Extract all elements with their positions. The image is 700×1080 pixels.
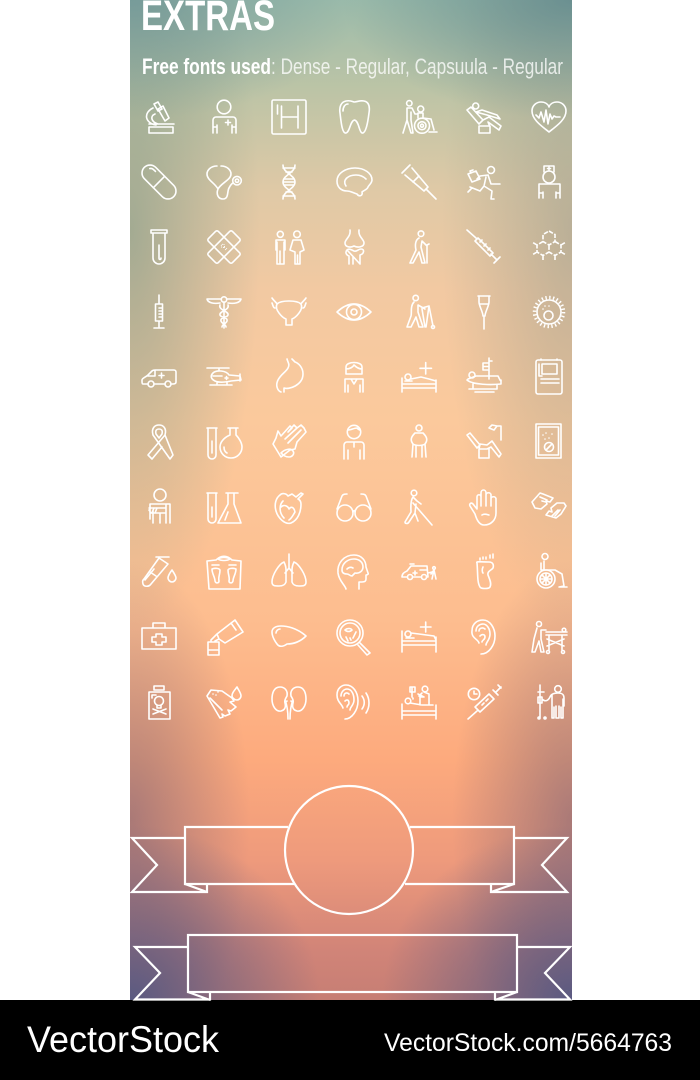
icon: test tube with drop bbox=[143, 557, 176, 586]
icon: bandage bbox=[207, 230, 241, 264]
icon: stretcher with carer bbox=[532, 622, 567, 654]
icon: medical monitor bbox=[536, 359, 562, 394]
icon: ear with sound waves bbox=[337, 685, 369, 719]
icon: test tube and conical flask bbox=[207, 493, 241, 523]
icon: person in wheelchair bbox=[537, 554, 567, 588]
icon: man bbox=[344, 425, 364, 459]
icon: knee joint bbox=[345, 230, 364, 264]
icon: hand washing with drop bbox=[207, 687, 241, 718]
icon: poison bottle bbox=[149, 686, 170, 719]
icon: pill bbox=[139, 162, 179, 202]
icon: man with walker bbox=[407, 295, 434, 328]
icon: foot bbox=[477, 554, 493, 588]
icon: crutch bbox=[402, 165, 436, 199]
icon: lungs bbox=[272, 554, 306, 586]
subtitle: fonts used bbox=[142, 54, 563, 79]
icon: glasses bbox=[337, 494, 371, 521]
lower ribbon banner bbox=[135, 935, 570, 1000]
icon: blind man with cane bbox=[405, 490, 432, 525]
icon grid bbox=[139, 100, 567, 719]
icon: caring hands bbox=[273, 425, 306, 457]
icon: vertical syringe bbox=[154, 295, 164, 328]
icon: eye bbox=[337, 304, 371, 320]
ribbon banner with circle bbox=[132, 786, 567, 914]
icon: kidneys bbox=[272, 687, 306, 719]
watermark url: VectorStock.com/5664763 bbox=[384, 1029, 672, 1057]
icon: awareness ribbon bbox=[148, 425, 173, 459]
icon: running medic bbox=[468, 166, 500, 199]
footer bar bbox=[0, 1000, 700, 1080]
subtitle: fonts used: Free fonts used bbox=[142, 54, 271, 79]
panel: gradient background bbox=[130, 0, 572, 1000]
lower ribbon body bbox=[188, 935, 517, 992]
lower right tail bbox=[495, 947, 570, 1000]
icon: man with IV drip bbox=[538, 685, 564, 719]
icon: vertical crutch bbox=[478, 296, 490, 329]
icon: ambulance bbox=[142, 370, 176, 387]
icon: dental chair with lamp bbox=[467, 425, 501, 458]
icon: caduceus bbox=[207, 297, 241, 328]
icon: man with arm sling bbox=[149, 489, 170, 523]
icon: magnifying glass with bacteria bbox=[337, 620, 370, 655]
icon: helicopter bbox=[207, 368, 241, 385]
icon: liver bbox=[272, 626, 306, 646]
icon: tooth bbox=[340, 101, 369, 133]
icon: patient in bed with doctor bbox=[402, 686, 436, 719]
icon: hospital sign bbox=[272, 100, 306, 134]
icon: hospital bed with cross bbox=[402, 362, 436, 392]
icon: wheelchair with carer bbox=[403, 101, 437, 133]
icon: bathroom scale bbox=[207, 556, 241, 589]
icon: ambulance with person bbox=[402, 564, 436, 580]
icon: surgery table bbox=[467, 358, 501, 392]
icon: doctor bbox=[213, 100, 236, 133]
icon: first aid kit bbox=[142, 623, 176, 649]
icon: female doctor bbox=[345, 362, 363, 392]
icon: stethoscope bbox=[207, 166, 241, 199]
icon: elderly woman bbox=[411, 425, 427, 457]
banner ribbon body bbox=[185, 827, 514, 884]
subtitle: fonts used: : Dense - Regular, Capsuula - Regular bbox=[271, 54, 563, 79]
icon: syringe with clock bbox=[468, 685, 501, 719]
icon: dental chair bbox=[467, 103, 501, 133]
icon: tablet in fizzy glass bbox=[536, 424, 561, 458]
icon: test tube and flask bbox=[207, 428, 242, 459]
icon: head with brain bbox=[338, 555, 368, 589]
icon: molecule bbox=[532, 231, 566, 261]
lower left tail bbox=[135, 947, 210, 1000]
icon: test tube bbox=[151, 230, 167, 264]
icon: bladder bbox=[272, 298, 306, 325]
icon: nurse bbox=[539, 166, 560, 198]
left ribbon tail bbox=[132, 838, 207, 892]
seal circle bbox=[285, 786, 413, 914]
icon: pouring bottle bbox=[208, 620, 243, 655]
icon: DNA bbox=[283, 165, 295, 199]
icon: microscope bbox=[147, 102, 174, 133]
right ribbon tail bbox=[491, 838, 567, 892]
icon: open hand bbox=[470, 490, 496, 525]
icon: sign language hands bbox=[532, 493, 566, 518]
icon: heart with pulse bbox=[532, 102, 566, 132]
icon: man and woman bbox=[276, 231, 304, 264]
watermark logo: VectorStock bbox=[27, 1019, 219, 1060]
icon: virus bbox=[534, 298, 564, 326]
icon: syringe diagonal bbox=[467, 230, 500, 263]
icon: anatomical heart bbox=[275, 493, 303, 523]
icon: stomach bbox=[277, 359, 303, 392]
icon: ear bbox=[472, 620, 495, 654]
icon: patient in bed with cross bbox=[402, 622, 436, 652]
icon: elderly man with cane bbox=[410, 231, 429, 263]
icon: brain bbox=[337, 168, 372, 196]
